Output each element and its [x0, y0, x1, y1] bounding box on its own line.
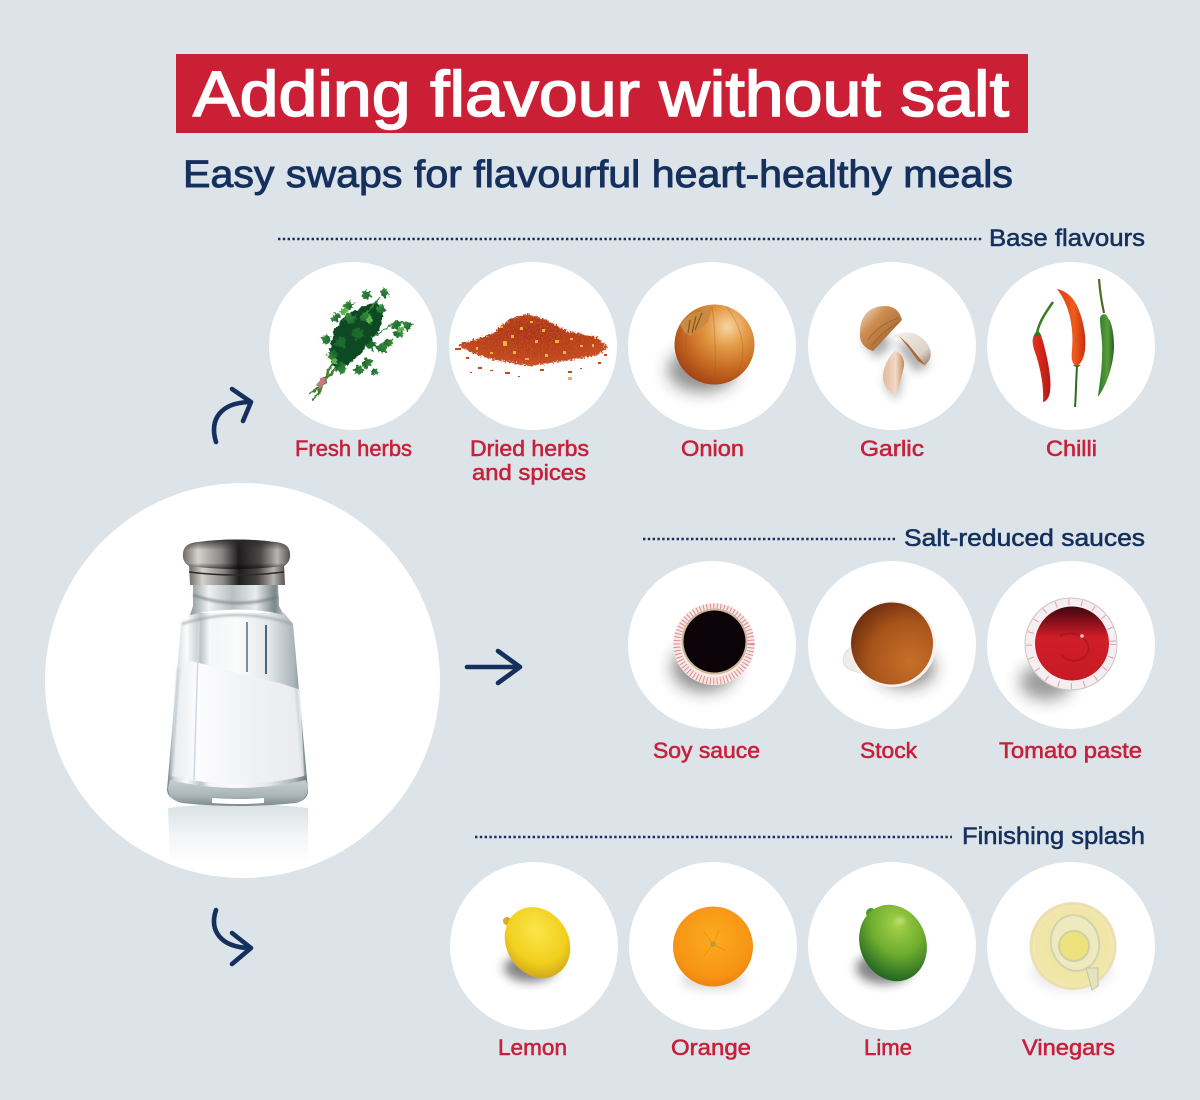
label: lime: Lime	[864, 1035, 912, 1060]
item: fresh herbs	[269, 262, 437, 430]
arrow: up to base flavours	[214, 389, 251, 442]
icon: stock bowl	[843, 601, 936, 688]
icon: tomato paste bowl	[1020, 598, 1117, 700]
label: lemon: Lemon	[498, 1035, 567, 1060]
icon: herb bunch	[310, 286, 415, 401]
icon: three chillies	[1033, 279, 1114, 407]
item: lemon	[450, 862, 618, 1030]
label: dried herbs and spices	[470, 436, 589, 485]
icon: soy sauce bowl	[672, 603, 755, 692]
arrow: right to sauces	[467, 651, 520, 683]
icon: onion	[668, 304, 754, 392]
subtitle: Easy swaps for flavourful heart-healthy meals	[183, 154, 1013, 196]
item: orange	[629, 862, 797, 1030]
arrow: down to finishing splash	[214, 910, 251, 964]
icon: orange	[673, 906, 753, 990]
panel: salt shaker	[45, 483, 440, 878]
label: dried herbs and spices: and spices	[472, 460, 586, 485]
label: tomato paste: Tomato paste	[999, 738, 1142, 763]
icon: garlic cloves	[860, 306, 931, 400]
label: stock: Stock	[860, 738, 918, 763]
label: soy sauce: Soy sauce	[653, 738, 760, 763]
label: vinegars: Vinegars	[1022, 1035, 1115, 1060]
label: garlic: Garlic	[860, 436, 924, 461]
item: lime	[808, 862, 976, 1030]
label: dried herbs and spices: Dried herbs	[470, 436, 589, 461]
item: dried herbs and spices	[449, 262, 617, 430]
item: tomato paste	[987, 561, 1155, 729]
section heading: base flavours: Base flavours	[989, 225, 1145, 252]
label: onion: Onion	[681, 436, 744, 461]
item: garlic	[808, 262, 976, 430]
section heading: finishing splash: Finishing splash	[962, 823, 1145, 850]
glass neck	[190, 585, 284, 615]
item: vinegars	[987, 862, 1155, 1030]
icon: lime	[848, 894, 938, 992]
item: stock	[808, 561, 976, 729]
item: soy sauce	[628, 561, 796, 729]
section heading: salt-reduced sauces: Salt-reduced sauces	[904, 525, 1145, 552]
item: onion	[628, 262, 796, 430]
icon: lemon	[492, 895, 583, 990]
icon: salt shaker	[167, 540, 308, 863]
label: chilli: Chilli	[1046, 436, 1097, 461]
glass body	[167, 613, 308, 806]
icon: vinegar jug	[1030, 902, 1116, 992]
metal cap	[189, 563, 285, 585]
item: chilli	[987, 262, 1155, 430]
label: orange: Orange	[671, 1035, 751, 1060]
salt	[172, 660, 304, 784]
label: fresh herbs: Fresh herbs	[295, 436, 412, 461]
reflection	[168, 804, 308, 863]
icon: spice pile	[455, 314, 608, 380]
title banner: Adding flavour without salt	[193, 58, 1009, 130]
